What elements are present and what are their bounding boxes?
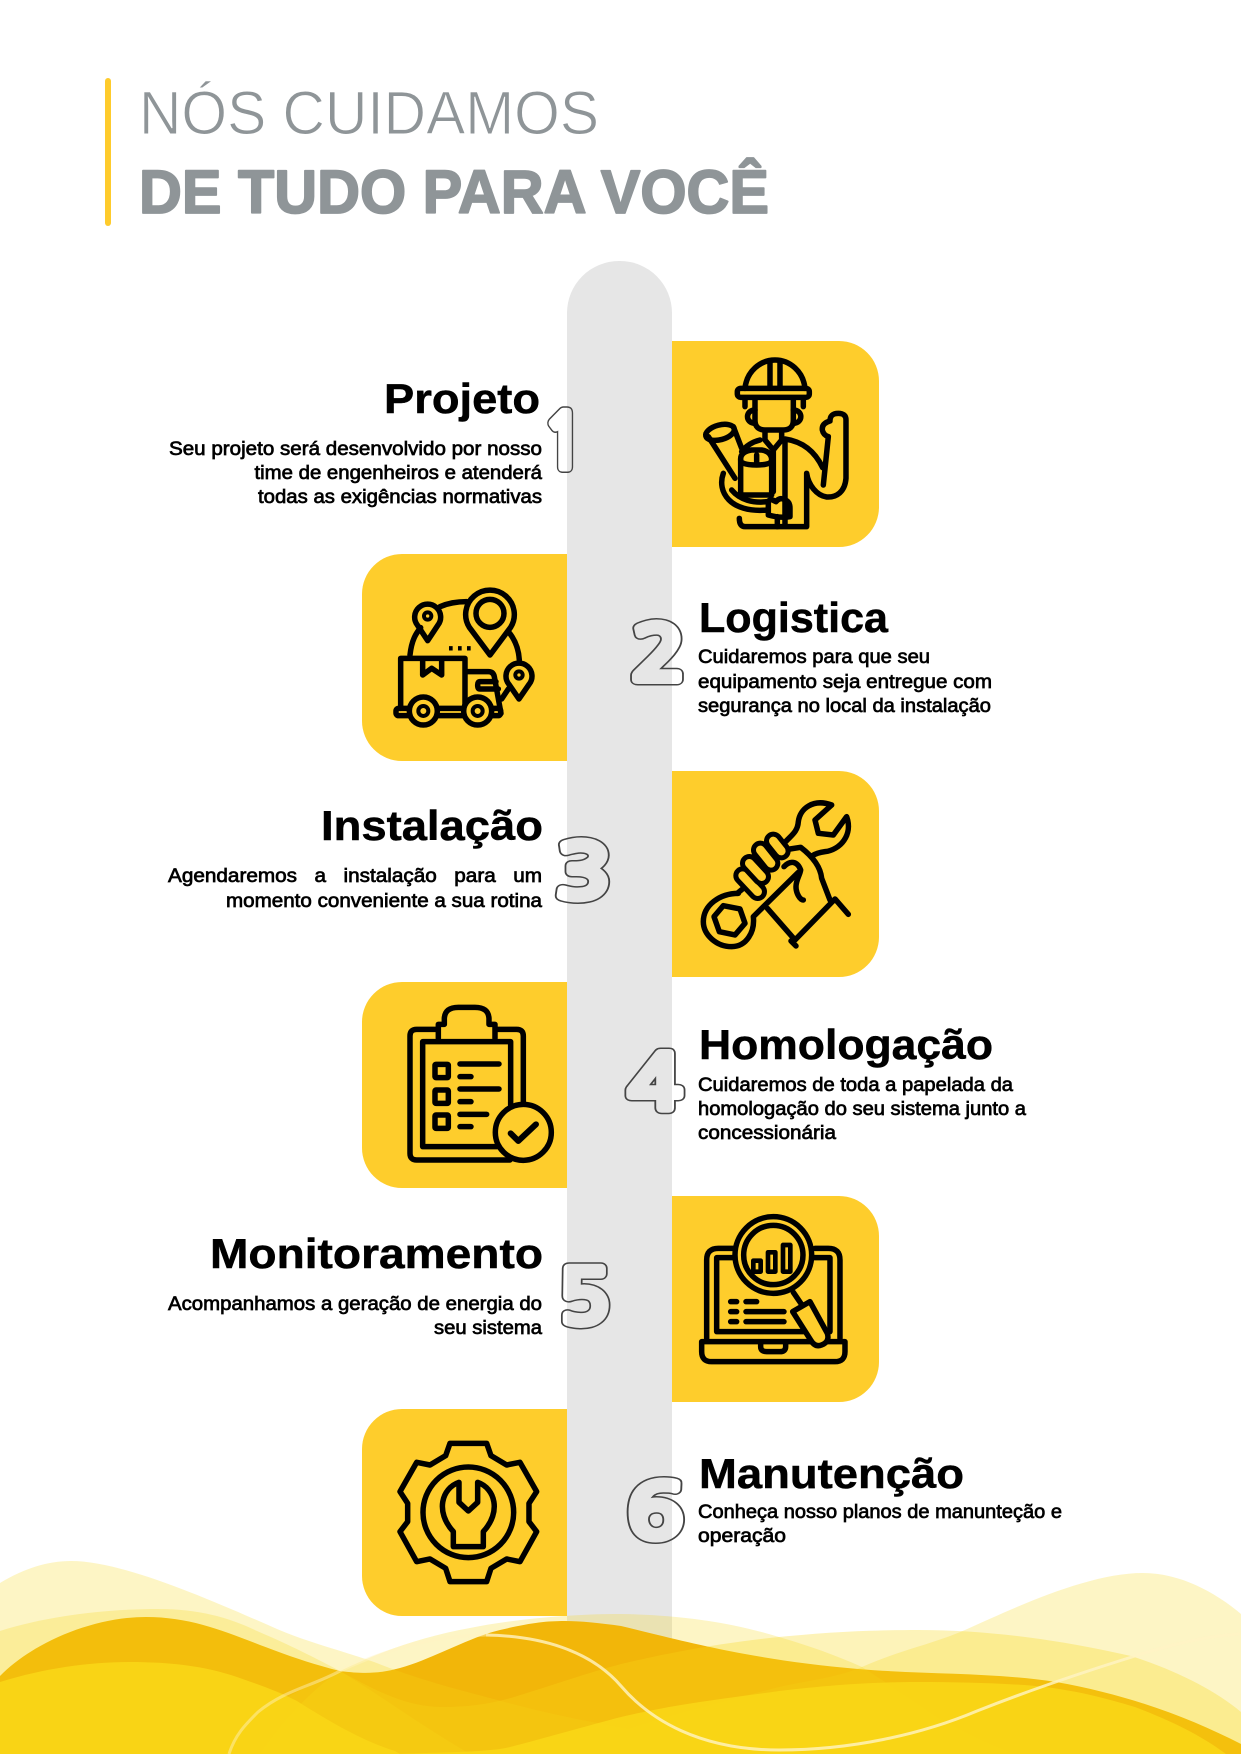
step 6: Manutenção	[362, 1409, 1062, 1616]
white accent curve	[486, 1634, 1240, 1750]
decorative yellow waves	[0, 1561, 1241, 1754]
step 2: Logistica	[362, 554, 992, 761]
description: Monitoramento	[168, 1293, 542, 1339]
description: Projeto: todas as exigências normativas	[258, 486, 542, 508]
description: Instalação: momento conveniente a sua rotina	[226, 890, 542, 912]
description: Homologação: homologação do seu sistema junto a	[698, 1098, 1026, 1120]
icon: hand holding wrench	[703, 803, 848, 947]
icon: engineer	[704, 360, 846, 527]
faint accent curve	[229, 1635, 486, 1754]
step 5: Monitoramento	[168, 1196, 879, 1402]
card: Projeto	[672, 341, 879, 547]
card: Instalação	[672, 771, 879, 977]
description: Monitoramento: Acompanhamos a geração de energia do	[168, 1293, 542, 1315]
description: Logistica: equipamento seja entregue com	[698, 671, 992, 693]
card: Logistica	[362, 554, 567, 761]
heading: Instalação: Instalação	[321, 802, 543, 849]
number 5: 5	[558, 1262, 610, 1336]
number 1: 1	[543, 406, 584, 480]
heading: Logistica: Logistica	[699, 594, 889, 641]
description: Projeto: time de engenheiros e atenderá	[254, 462, 542, 484]
title line 2: DE TUDO PARA VOCÊ	[139, 158, 769, 226]
heading: Monitoramento: Monitoramento	[210, 1230, 543, 1277]
heading: Homologação: Homologação	[699, 1021, 993, 1068]
card: Homologação	[362, 982, 567, 1188]
description: Homologação: concessionária	[698, 1122, 836, 1144]
step 3: Instalação	[168, 771, 879, 977]
number 4: 4	[628, 1047, 682, 1121]
description: Homologação: Cuidaremos de toda a papelada da	[698, 1074, 1013, 1096]
description: Logistica: segurança no local da instalação	[698, 695, 991, 717]
description: Projeto: Seu projeto será desenvolvido por nosso	[169, 438, 542, 460]
title accent bar	[105, 78, 111, 226]
icon: clipboard checklist	[410, 1007, 551, 1160]
central timeline bar	[567, 261, 672, 1660]
description: Projeto	[169, 438, 542, 508]
description: Instalação: Agendaremos a instalação para um	[168, 865, 542, 887]
number 6: 6	[627, 1476, 684, 1550]
number 2: 2	[631, 618, 686, 692]
card: Manutenção	[362, 1409, 567, 1616]
title block	[105, 78, 769, 226]
number 3: 3	[556, 836, 612, 910]
icon: laptop and magnifier	[702, 1217, 845, 1362]
description: Manutenção: Conheça nosso planos de manunteção e	[698, 1501, 1062, 1523]
description: Manutenção	[698, 1501, 1062, 1547]
description: Logistica	[698, 646, 992, 717]
description: Manutenção: operação	[698, 1525, 786, 1547]
description: Logistica: Cuidaremos para que seu	[698, 646, 930, 668]
description: Homologação	[698, 1074, 1026, 1144]
step 4: Homologação	[362, 982, 1026, 1188]
description: Monitoramento: seu sistema	[434, 1317, 542, 1339]
icon: delivery truck and pins	[396, 590, 532, 725]
heading: Manutenção: Manutenção	[699, 1450, 964, 1497]
description: Instalação	[168, 865, 542, 912]
card: Monitoramento	[672, 1196, 879, 1402]
heading: Projeto: Projeto	[384, 375, 540, 422]
icon: gear with wrench	[400, 1443, 537, 1582]
title line 1: NÓS CUIDAMOS	[139, 79, 599, 147]
step 1: Projeto	[169, 341, 879, 547]
